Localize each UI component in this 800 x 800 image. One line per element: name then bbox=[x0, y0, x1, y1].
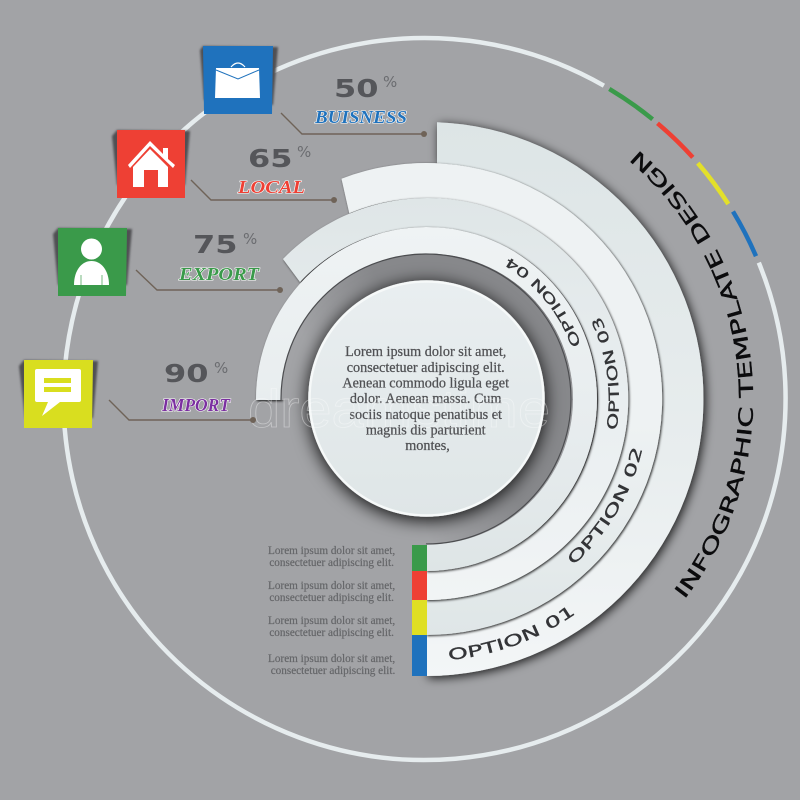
icon: person bbox=[53, 228, 132, 296]
icon: speech bubble bbox=[19, 360, 98, 428]
center text: montes, bbox=[405, 438, 450, 454]
key descriptions: Lorem ipsum dolor sit amet, bbox=[268, 580, 395, 592]
center text: magnis dis parturient bbox=[366, 422, 486, 438]
ring: option 02 bbox=[342, 163, 662, 635]
callout: import bbox=[19, 358, 256, 428]
ring: option 03 bbox=[283, 198, 628, 600]
colour key bars bbox=[412, 545, 427, 676]
callout: import: % bbox=[214, 359, 228, 377]
icon: briefcase bbox=[200, 46, 278, 114]
curved title: INFOGRAPHIC TEMPLATE DESIGN bbox=[630, 151, 754, 598]
value: 90 bbox=[164, 358, 209, 388]
leader bbox=[191, 180, 334, 200]
center text: consectetuer adipiscing elit. bbox=[347, 360, 505, 376]
key descriptions: Lorem ipsum dolor sit amet, bbox=[268, 615, 395, 627]
callout: local bbox=[112, 130, 337, 203]
center text: Aenean commodo ligula eget bbox=[342, 376, 509, 392]
inner dark band bbox=[281, 254, 571, 544]
callout: local: % bbox=[297, 143, 311, 161]
value: 75 bbox=[193, 229, 238, 259]
label: option 03: OPTION 03 bbox=[592, 318, 619, 429]
center text: sociis natoque penatibus et bbox=[349, 407, 502, 423]
key descriptions: consectetuer adipiscing elit. bbox=[271, 665, 395, 677]
center circle bbox=[310, 282, 544, 516]
label: option 02: OPTION 02 bbox=[569, 448, 642, 562]
callout: export bbox=[53, 228, 283, 296]
center text: Lorem ipsum dolor sit amet, bbox=[345, 344, 506, 360]
ring: option 01 bbox=[426, 122, 703, 676]
icon: house bbox=[112, 130, 190, 198]
callout: business: % bbox=[383, 73, 397, 91]
key descriptions: consectetuer adipiscing elit. bbox=[269, 557, 394, 569]
ring labels bbox=[449, 258, 642, 660]
watermark: dreamstime bbox=[248, 380, 550, 439]
value: 50 bbox=[334, 73, 379, 103]
label: IMPORT bbox=[161, 395, 231, 415]
key descriptions: consectetuer adipiscing elit. bbox=[269, 627, 394, 639]
label: EXPORT bbox=[178, 264, 261, 284]
key descriptions: consectetuer adipiscing elit. bbox=[269, 592, 394, 604]
key descriptions: Lorem ipsum dolor sit amet, bbox=[268, 545, 395, 557]
callout: business bbox=[200, 46, 427, 137]
callout: export: % bbox=[243, 230, 257, 248]
label: LOCAL bbox=[237, 177, 305, 197]
ring: option 04 bbox=[256, 227, 597, 571]
center text: dolor. Aenean massa. Cum bbox=[350, 391, 502, 407]
leader bbox=[136, 270, 280, 290]
key descriptions: Lorem ipsum dolor sit amet, bbox=[268, 653, 395, 665]
value: 65 bbox=[248, 143, 293, 173]
label: BUISNESS bbox=[314, 107, 407, 127]
label: option 01: OPTION 01 bbox=[449, 607, 574, 660]
label: option 04: OPTION 04 bbox=[506, 258, 580, 346]
leader bbox=[281, 113, 424, 134]
leader bbox=[109, 400, 253, 420]
concentric option rings bbox=[256, 122, 703, 676]
